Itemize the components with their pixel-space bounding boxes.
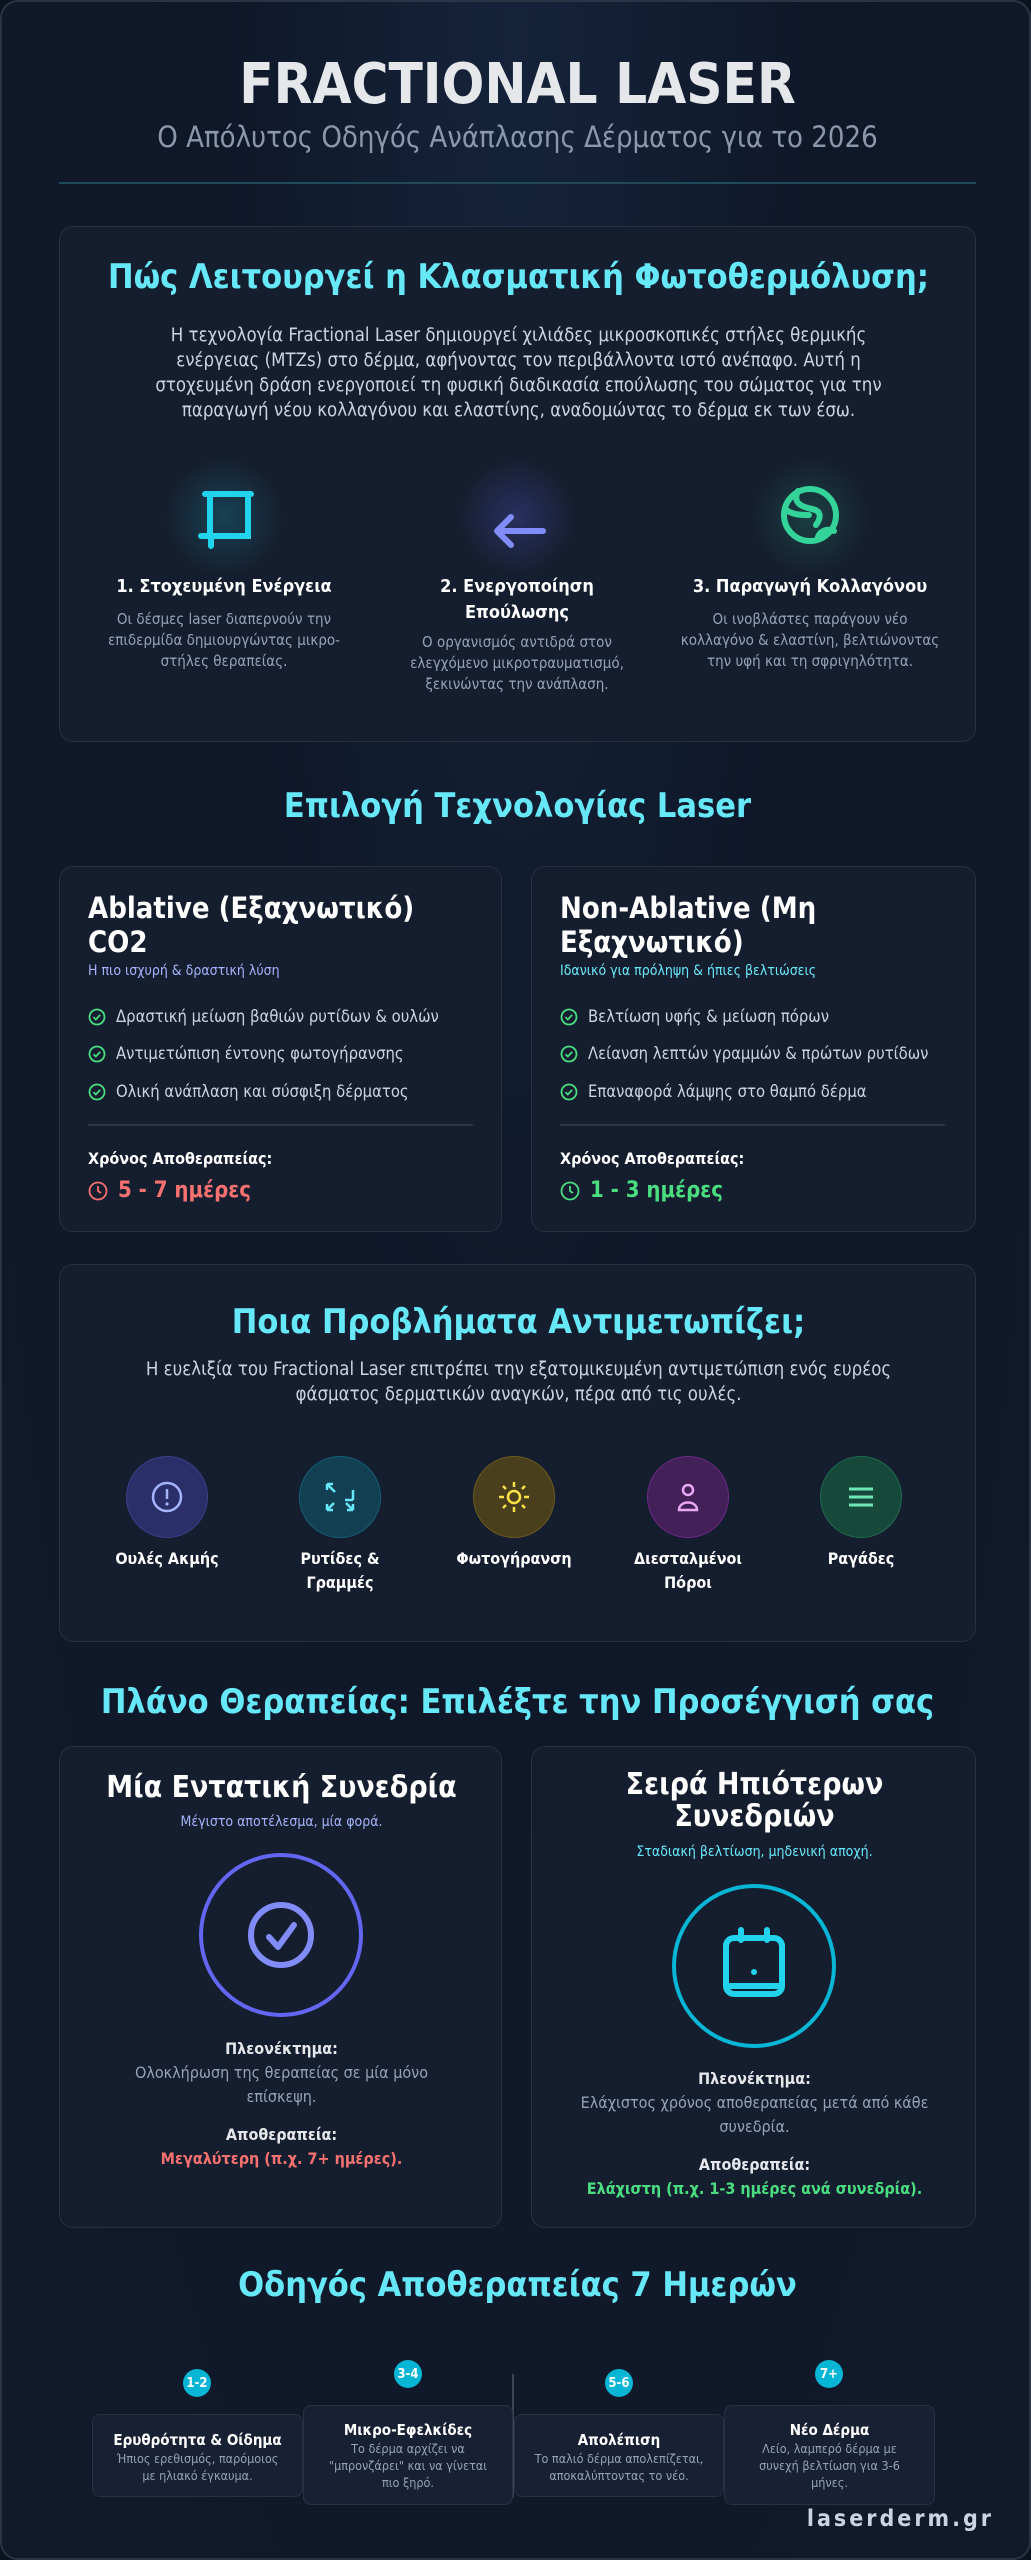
heading: how it works: Πώς Λειτουργεί η Κλασματική Φωτοθερμόλυση;: [108, 257, 929, 297]
stage 3-4: [303, 2360, 513, 2505]
intro paragraph: Η τεχνολογία Fractional Laser δημιουργεί χιλιάδες μικροσκοπικές στήλες θερμικής: [171, 325, 866, 346]
heading: recovery guide: Οδηγός Αποθεραπείας 7 Ημερών: [238, 2265, 797, 2305]
label: pores: Πόροι: [664, 1573, 712, 1592]
icon: sun: [473, 1456, 555, 1538]
ablative bullets: Ολική ανάπλαση και σύσφιξη δέρματος: [116, 1082, 409, 1101]
step 2 text: [410, 633, 624, 693]
ablative bullets: Δραστική μείωση βαθιών ρυτίδων & ουλών: [116, 1007, 439, 1026]
step 1 text: Οι δέσμες laser διαπερνούν την: [117, 610, 331, 628]
panel: problems: [59, 1264, 976, 1642]
multiple sessions title: [626, 1767, 883, 1834]
ablative subtitle: Η πιο ισχυρή & δραστική λύση: [88, 963, 280, 979]
problems paragraph: Η ευελιξία του Fractional Laser επιτρέπει την εξατομικευμένη αντιμετώπιση ενός ευρέος: [146, 1359, 891, 1380]
non-ablative bullets: Βελτίωση υφής & μείωση πόρων: [588, 1007, 829, 1026]
intro paragraph: ενέργειας (MTZs) στο δέρμα, αφήνοντας τον περιβάλλοντα ιστό ανέπαφο. Αυτή η: [176, 350, 861, 371]
stage 5-6: Απολέπιση: [578, 2431, 660, 2449]
label: acne: Ουλές Ακμής: [115, 1549, 219, 1568]
heading: treatment plan: Πλάνο Θεραπείας: Επιλέξτε την Προσέγγισή σας: [101, 1682, 934, 1722]
stage 5-6: Το παλιό δέρμα απολεπίζεται,: [535, 2451, 703, 2466]
icon: calendar circle: [672, 1884, 836, 2048]
step 3 title: 3. Παραγωγή Κολλαγόνου: [693, 576, 927, 597]
label: pores: [634, 1549, 742, 1592]
non-ablative title: Εξαχνωτικό): [560, 925, 744, 959]
single session subtitle: Μέγιστο αποτέλεσμα, μία φορά.: [180, 1814, 383, 1830]
stage 7+: [724, 2360, 935, 2505]
step 3 text: κολλαγόνο & ελαστίνη, βελτιώνοντας: [681, 631, 939, 649]
problems paragraph: [146, 1359, 891, 1405]
intro paragraph: στοχευμένη δράση ενεργοποιεί τη φυσική διαδικασία επούλωσης του σώματος για την: [155, 375, 882, 396]
non-ablative recovery: 1 - 3 ημέρες: [590, 1178, 723, 1203]
multiple sessions title: Σειρά Ηπιότερων: [626, 1767, 883, 1802]
ablative recovery: [88, 1149, 272, 1203]
step 2: [410, 468, 624, 693]
ablative bullets: Αντιμετώπιση έντονης φωτογήρανσης: [116, 1044, 404, 1063]
step 2 text: ξεκινώντας την ανάπλαση.: [425, 675, 609, 693]
stage 3-4: "μπρονζάρει" και να γίνεται: [329, 2458, 487, 2473]
step 1 text: [108, 610, 340, 670]
non-ablative bullets: Λείανση λεπτών γραμμών & πρώτων ρυτίδων: [588, 1044, 928, 1063]
multiple sessions title: Συνεδριών: [674, 1799, 835, 1834]
stage 3-4: Μικρο-Εφελκίδες: [344, 2421, 472, 2439]
multiple sessions subtitle: Σταδιακή βελτίωση, μηδενική αποχή.: [636, 1844, 873, 1860]
label: wrinkles: [300, 1549, 380, 1592]
step 3 text: την υφή και τη σφριγηλότητα.: [707, 652, 913, 670]
ablative title: CO2: [88, 925, 147, 959]
stage 7+: 7+: [820, 2366, 838, 2382]
label: stretch marks: Ραγάδες: [828, 1549, 894, 1568]
icon: check circle: [199, 1853, 363, 2017]
non-ablative bullets: [560, 1007, 928, 1101]
stage 1-2: 1-2: [186, 2376, 208, 2390]
label: pores: Διεσταλμένοι: [634, 1549, 742, 1568]
icon: globe: [750, 457, 870, 577]
non-ablative title: Non-Ablative (Μη: [560, 891, 816, 925]
single session text: [135, 2039, 428, 2168]
heading: laser technology: Επιλογή Τεχνολογίας Laser: [284, 786, 751, 826]
icon: acne: [126, 1456, 208, 1538]
step 2 title: 2. Ενεργοποίηση: [440, 576, 594, 597]
stage 1-2: Ερυθρότητα & Οίδημα: [113, 2431, 282, 2449]
panel: multiple sessions: [531, 1746, 976, 2228]
ablative bullets: [88, 1007, 439, 1101]
timeline: [92, 2360, 935, 2505]
non-ablative bullets: Επαναφορά λάμψης στο θαμπό δέρμα: [588, 1082, 867, 1101]
single session text: Ολοκλήρωση της θεραπείας σε μία μόνο επίσκεψη.: [135, 2063, 428, 2106]
stage 3-4: 3-4: [397, 2366, 419, 2382]
intro paragraph: παραγωγή νέου κολλαγόνου και ελαστίνης, αναδομώντας το δέρμα εκ των έσω.: [182, 400, 855, 421]
heading: problems: Ποια Προβλήματα Αντιμετωπίζει;: [232, 1302, 805, 1342]
icon: stretch marks: [820, 1456, 902, 1538]
stage 5-6: [514, 2369, 724, 2497]
non-ablative recovery: [560, 1149, 744, 1203]
panel: single session: [59, 1746, 502, 2228]
multiple sessions text: Ελάχιστος χρόνος αποθεραπείας μετά από κάθε συνεδρία.: [581, 2093, 928, 2136]
panel: ablative: [59, 866, 502, 1232]
non-ablative recovery: Χρόνος Αποθεραπείας:: [560, 1149, 744, 1168]
stage 3-4: πιο ξηρό.: [382, 2475, 434, 2490]
non-ablative subtitle: Ιδανικό για πρόληψη & ήπιες βελτιώσεις: [560, 963, 816, 979]
step 2 title: Επούλωσης: [465, 602, 569, 623]
stage 7+: Νέο Δέρμα: [790, 2421, 869, 2439]
step 2 title: [440, 576, 594, 623]
multiple sessions text: Πλεονέκτημα:: [698, 2069, 811, 2088]
step 1 text: επιδερμίδα δημιουργώντας μικρο-: [108, 631, 340, 649]
multiple sessions text: [581, 2069, 928, 2198]
label: photoaging: Φωτογήρανση: [456, 1549, 572, 1568]
stage 1-2: [92, 2369, 303, 2497]
panel: how it works: [59, 226, 976, 742]
stage 7+: μήνες.: [811, 2475, 848, 2490]
step 3 text: [681, 610, 939, 670]
step 3: [681, 473, 939, 670]
label: wrinkles: Γραμμές: [306, 1573, 374, 1592]
step 1 title: 1. Στοχευμένη Ενέργεια: [116, 576, 332, 597]
single session text: Αποθεραπεία:: [226, 2125, 337, 2144]
stage 7+: Λείο, λαμπερό δέρμα με: [762, 2441, 897, 2456]
step 2 text: Ο οργανισμός αντιδρά στον: [422, 633, 612, 651]
ablative title: Ablative (Εξαχνωτικό): [88, 891, 414, 925]
stage 7+: συνεχή βελτίωση για 3-6: [759, 2458, 900, 2473]
stage 5-6: αποκαλύπτοντας το νέο.: [549, 2468, 689, 2483]
step 3 text: Οι ινοβλάστες παράγουν νέο: [713, 610, 907, 628]
step 1: [108, 470, 340, 670]
panel: non-ablative: [531, 866, 976, 1232]
stage 3-4: Το δέρμα αρχίζει να: [351, 2441, 465, 2456]
single session text: Μεγαλύτερη (π.χ. 7+ ημέρες).: [161, 2149, 402, 2168]
ablative title: [88, 891, 414, 959]
label: wrinkles: Ρυτίδες &: [300, 1549, 380, 1568]
multiple sessions text: Αποθεραπεία:: [699, 2155, 810, 2174]
stage 5-6: 5-6: [608, 2376, 630, 2390]
subtitle: Ο Απόλυτος Οδηγός Ανάπλασης Δέρματος για το 2026: [157, 120, 878, 154]
single session text: Πλεονέκτημα:: [225, 2039, 338, 2058]
stage 1-2: με ηλιακό έγκαυμα.: [142, 2468, 253, 2483]
icon: pores: [647, 1456, 729, 1538]
step 2 text: ελεγχόμενο μικροτραυματισμό,: [410, 654, 624, 672]
stage 1-2: Ήπιος ερεθισμός, παρόμοιος: [117, 2451, 278, 2466]
icon: wrinkles: [299, 1456, 381, 1538]
single session title: Μία Εντατική Συνεδρία: [106, 1770, 457, 1805]
intro paragraph: [155, 325, 882, 421]
ablative recovery: Χρόνος Αποθεραπείας:: [88, 1149, 272, 1168]
icon: laser: [164, 457, 284, 577]
step 1 text: στήλες θεραπείας.: [161, 652, 287, 670]
title: FRACTIONAL LASER: [239, 52, 796, 117]
ablative recovery: 5 - 7 ημέρες: [118, 1178, 251, 1203]
multiple sessions text: Ελάχιστη (π.χ. 1-3 ημέρες ανά συνεδρία).: [587, 2179, 922, 2198]
non-ablative title: [560, 891, 816, 959]
icon: arrow: [457, 457, 577, 577]
problems paragraph: φάσματος δερματικών αναγκών, πέρα από τις ουλές.: [296, 1384, 742, 1405]
footer: brand: laserderm.gr: [807, 2506, 994, 2532]
